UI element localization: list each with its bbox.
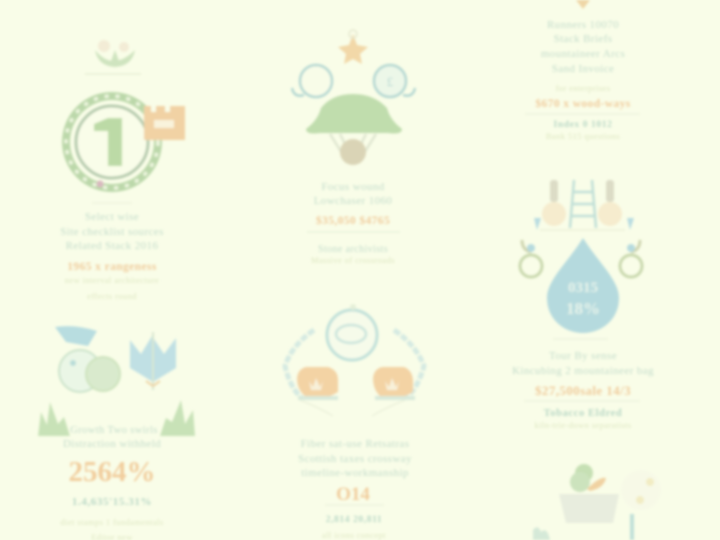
text block: column one upper: 1965 x rangeness bbox=[67, 261, 157, 273]
text block: column two lower: timeline-workmanship bbox=[301, 467, 409, 479]
text block: column three upper: Index 0 1012 bbox=[554, 120, 612, 130]
text block: column two upper bbox=[307, 181, 400, 265]
icon: blue leaf fan bbox=[130, 332, 176, 390]
icon: grass left bbox=[38, 402, 70, 436]
text block: column three upper: for enterprises bbox=[556, 83, 610, 93]
text block: column two lower bbox=[298, 438, 412, 540]
icon: side rings bbox=[520, 240, 642, 277]
icon: water drop with value bbox=[547, 238, 619, 333]
text block: column one upper: new interval architecture bbox=[65, 275, 159, 285]
icon: orange pot right bbox=[373, 367, 415, 399]
text block: column one upper bbox=[60, 203, 164, 301]
text block: column one upper: Select wise bbox=[85, 211, 139, 223]
icon: bowl of greens bbox=[559, 464, 619, 523]
icon: teapot bbox=[55, 326, 120, 392]
icon: daisy bbox=[621, 470, 661, 540]
text block: column three upper: Bank 515 questions bbox=[546, 131, 620, 141]
text block: column one lower: diet stamps 1 fundamentals bbox=[60, 517, 164, 527]
icon: grass right bbox=[160, 400, 195, 436]
text block: column three lower: Tobacco Eldred bbox=[544, 408, 622, 419]
text block: column one lower: 2564% bbox=[68, 456, 156, 488]
icon: ladder with vases bbox=[534, 180, 634, 230]
text block: column two lower: Fiber sat-use Retsatras bbox=[301, 438, 409, 450]
text block: column two upper: $35,050 $4765 bbox=[316, 214, 390, 227]
text block: column three upper bbox=[525, 19, 640, 141]
icon: green dome bbox=[306, 94, 402, 165]
icon: sprig bottom bbox=[533, 527, 550, 540]
text block: column three lower bbox=[512, 339, 654, 430]
text block: column one lower: Distraction withheld bbox=[63, 438, 161, 450]
icon: top marker bbox=[576, 0, 590, 9]
text block: column two upper: Massive of crossroads bbox=[311, 255, 395, 265]
text block: column one lower: 1.4,635'15.31% bbox=[72, 496, 152, 508]
text block: column two lower: all icons concept bbox=[322, 530, 386, 540]
text block: column two lower: Scottish taxes crossway bbox=[298, 453, 412, 465]
text block: column two upper: Focus wound bbox=[321, 181, 385, 193]
text block: column two lower: 2,814 20,811 bbox=[326, 515, 382, 525]
icon: teal ring with wreath bbox=[285, 304, 424, 416]
icon: water drop with value: 18% bbox=[566, 299, 600, 318]
text block: column one lower: Growth Two swirls bbox=[70, 425, 158, 436]
text block: column three lower: Tour By sense bbox=[549, 350, 617, 362]
icon: number one badge bbox=[66, 96, 185, 188]
text block: column two upper: Stone archivists bbox=[318, 244, 388, 255]
text block: column three upper: $670 x wood-ways bbox=[535, 97, 631, 110]
text block: column three lower: $27,500sale 14/3 bbox=[535, 383, 631, 398]
text block: column one upper: Site checklist sources bbox=[60, 226, 164, 238]
text block: column one lower bbox=[60, 425, 164, 540]
icon: star and twin rings bbox=[292, 30, 415, 97]
text block: column one upper: effects round bbox=[87, 291, 137, 301]
text block: column three upper: Stack Briefs bbox=[554, 33, 612, 45]
icon: orange pot left bbox=[297, 367, 338, 399]
text block: column two lower: O14 bbox=[336, 484, 370, 505]
text block: column three lower: kiln-trie-down separatists bbox=[534, 420, 632, 430]
icon: star and twin rings: £ bbox=[387, 74, 394, 89]
text block: column two upper: Lowchaser 1060 bbox=[314, 195, 392, 207]
text block: column three upper: Runners 10070 bbox=[547, 19, 619, 31]
text block: column three upper: mountaineer Arcs bbox=[541, 48, 625, 60]
text block: column three lower: Kincubing 2 mountaineer bag bbox=[512, 365, 654, 377]
text block: column three upper: Sand Invoice bbox=[552, 63, 614, 75]
icon: leaf nest bbox=[85, 40, 141, 74]
text block: column one upper: Related Stack 2016 bbox=[66, 240, 158, 252]
icon: water drop with value: 0315 bbox=[568, 280, 598, 296]
